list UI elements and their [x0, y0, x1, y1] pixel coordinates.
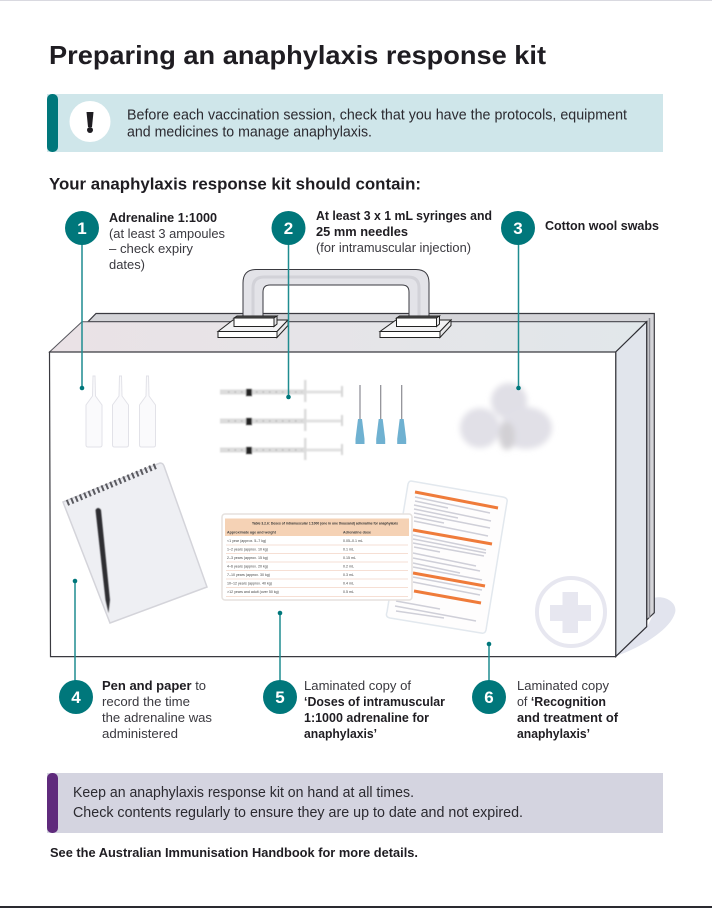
doses table card: 2–3 years (approx. 15 kg): [227, 556, 268, 560]
item 5: doses table: anaphylaxis’: [304, 726, 377, 741]
handle right base: [380, 316, 451, 338]
ampoules: [86, 376, 156, 447]
doses table card: 0.05–0.1 mL: [343, 539, 363, 543]
item 1: adrenaline: – check expiry: [109, 241, 194, 256]
item 3: cotton wool swabs: Cotton wool swabs: [545, 218, 659, 233]
handle: [218, 270, 451, 338]
doses table card: 0.2 mL: [343, 564, 354, 568]
case front: [50, 352, 616, 657]
item 1: adrenaline: dates): [109, 257, 145, 272]
item 5: doses table: ‘Doses of intramuscular: [304, 694, 445, 709]
callout text: [127, 108, 627, 140]
doses table card: 0.4 mL: [343, 582, 354, 586]
callout: keep kit on hand: Check contents regularly to ensure they are up to date and not expired.: [73, 805, 523, 821]
item 1: adrenaline: [65, 210, 225, 390]
doses table card: 4–6 years (approx. 20 kg): [227, 564, 268, 568]
spiral binding: [67, 466, 156, 503]
item 2: syringes and needles: (for intramuscular injection): [316, 240, 471, 255]
doses table card: 1–2 years (approx. 10 kg): [227, 548, 268, 552]
doses table card: 0.15 mL: [343, 556, 356, 560]
item 3: cotton wool swabs: 3: [513, 219, 523, 238]
title: Preparing an anaphylaxis response kit: [49, 40, 546, 70]
item 6: recognition and treatment: anaphylaxis’: [517, 726, 590, 741]
item 5: doses table: 1:1000 adrenaline for: [304, 710, 429, 725]
doses table card: 10–12 years (approx. 40 kg): [227, 582, 272, 586]
item 6: recognition and treatment: 6: [484, 688, 494, 707]
doses table card: >12 years and adult (over 50 kg): [227, 590, 279, 594]
footer note: See the Australian Immunisation Handbook for more details.: [50, 846, 418, 860]
item 4: pen and paper: Pen and paper to: [102, 678, 206, 693]
item 4: pen and paper: the adrenaline was: [102, 710, 212, 725]
doses table card: Table 3.2.6: Doses of intramuscular 1:1000 (one in one thousand) adrenaline for anaphylaxis: [252, 522, 398, 526]
syringes: [220, 380, 343, 460]
item 2: syringes and needles: At least 3 x 1 mL syringes and: [316, 208, 492, 223]
callout: keep kit on hand: Keep an anaphylaxis response kit on hand at all times.: [73, 785, 414, 801]
item 4: pen and paper: record the time: [102, 694, 190, 709]
item 6: recognition and treatment: and treatment of: [517, 710, 619, 725]
item 6: recognition and treatment: Laminated copy: [517, 678, 610, 693]
item 5: doses table: Laminated copy of: [304, 678, 411, 693]
cotton wool swabs: [460, 383, 552, 450]
case lid: [50, 322, 647, 352]
icon: exclamation mark: [70, 101, 110, 142]
callout text: Before each vaccination session, check that you have the protocols, equipment: [127, 108, 627, 124]
case shadow: [616, 597, 675, 656]
case back strip: [88, 314, 654, 620]
callout: before each session: [47, 94, 663, 152]
notepad and pen: [63, 463, 207, 623]
item 6: recognition and treatment: of ‘Recognition: [517, 694, 606, 709]
item 2: syringes and needles: 2: [284, 219, 293, 238]
item 4: pen and paper: 4: [71, 688, 81, 707]
needles: [356, 385, 406, 444]
case side: [616, 322, 647, 657]
handle left base: [218, 316, 288, 338]
item 5: doses table: 5: [275, 688, 285, 707]
callout: keep kit on hand: [47, 773, 663, 833]
recognition and treatment document: [386, 481, 507, 633]
item 1: adrenaline: Adrenaline 1:1000: [109, 210, 217, 225]
doses table card: 0.1 mL: [343, 548, 354, 552]
doses table card: 0.5 mL: [343, 590, 354, 594]
item 4: pen and paper: administered: [102, 726, 178, 741]
item 3: cotton wool swabs: [501, 211, 659, 390]
doses table card: [222, 514, 412, 600]
icon: first aid cross: [537, 578, 605, 646]
item 2: syringes and needles: 25 mm needles: [316, 224, 408, 239]
item 1: adrenaline: (at least 3 ampoules: [109, 226, 225, 241]
doses table card: Adrenaline dose: [343, 530, 371, 534]
item 5: doses table: [263, 611, 445, 741]
heading: kit contents: Your anaphylaxis response kit should contain:: [49, 176, 421, 194]
item 6: recognition and treatment: [472, 642, 619, 741]
pen: [96, 508, 110, 613]
doses table card: <1 year (approx. 5–7 kg): [227, 539, 266, 543]
doses table card: 7–10 years (approx. 30 kg): [227, 573, 270, 577]
briefcase: [50, 270, 675, 657]
doses table card: 0.3 mL: [343, 573, 354, 577]
item 4: pen and paper: [59, 579, 212, 741]
callout text: and medicines to manage anaphylaxis.: [127, 124, 372, 140]
item 2: syringes and needles: [272, 208, 492, 399]
doses table card: Approximate age and weight: [227, 530, 277, 534]
item 1: adrenaline: 1: [77, 219, 87, 238]
